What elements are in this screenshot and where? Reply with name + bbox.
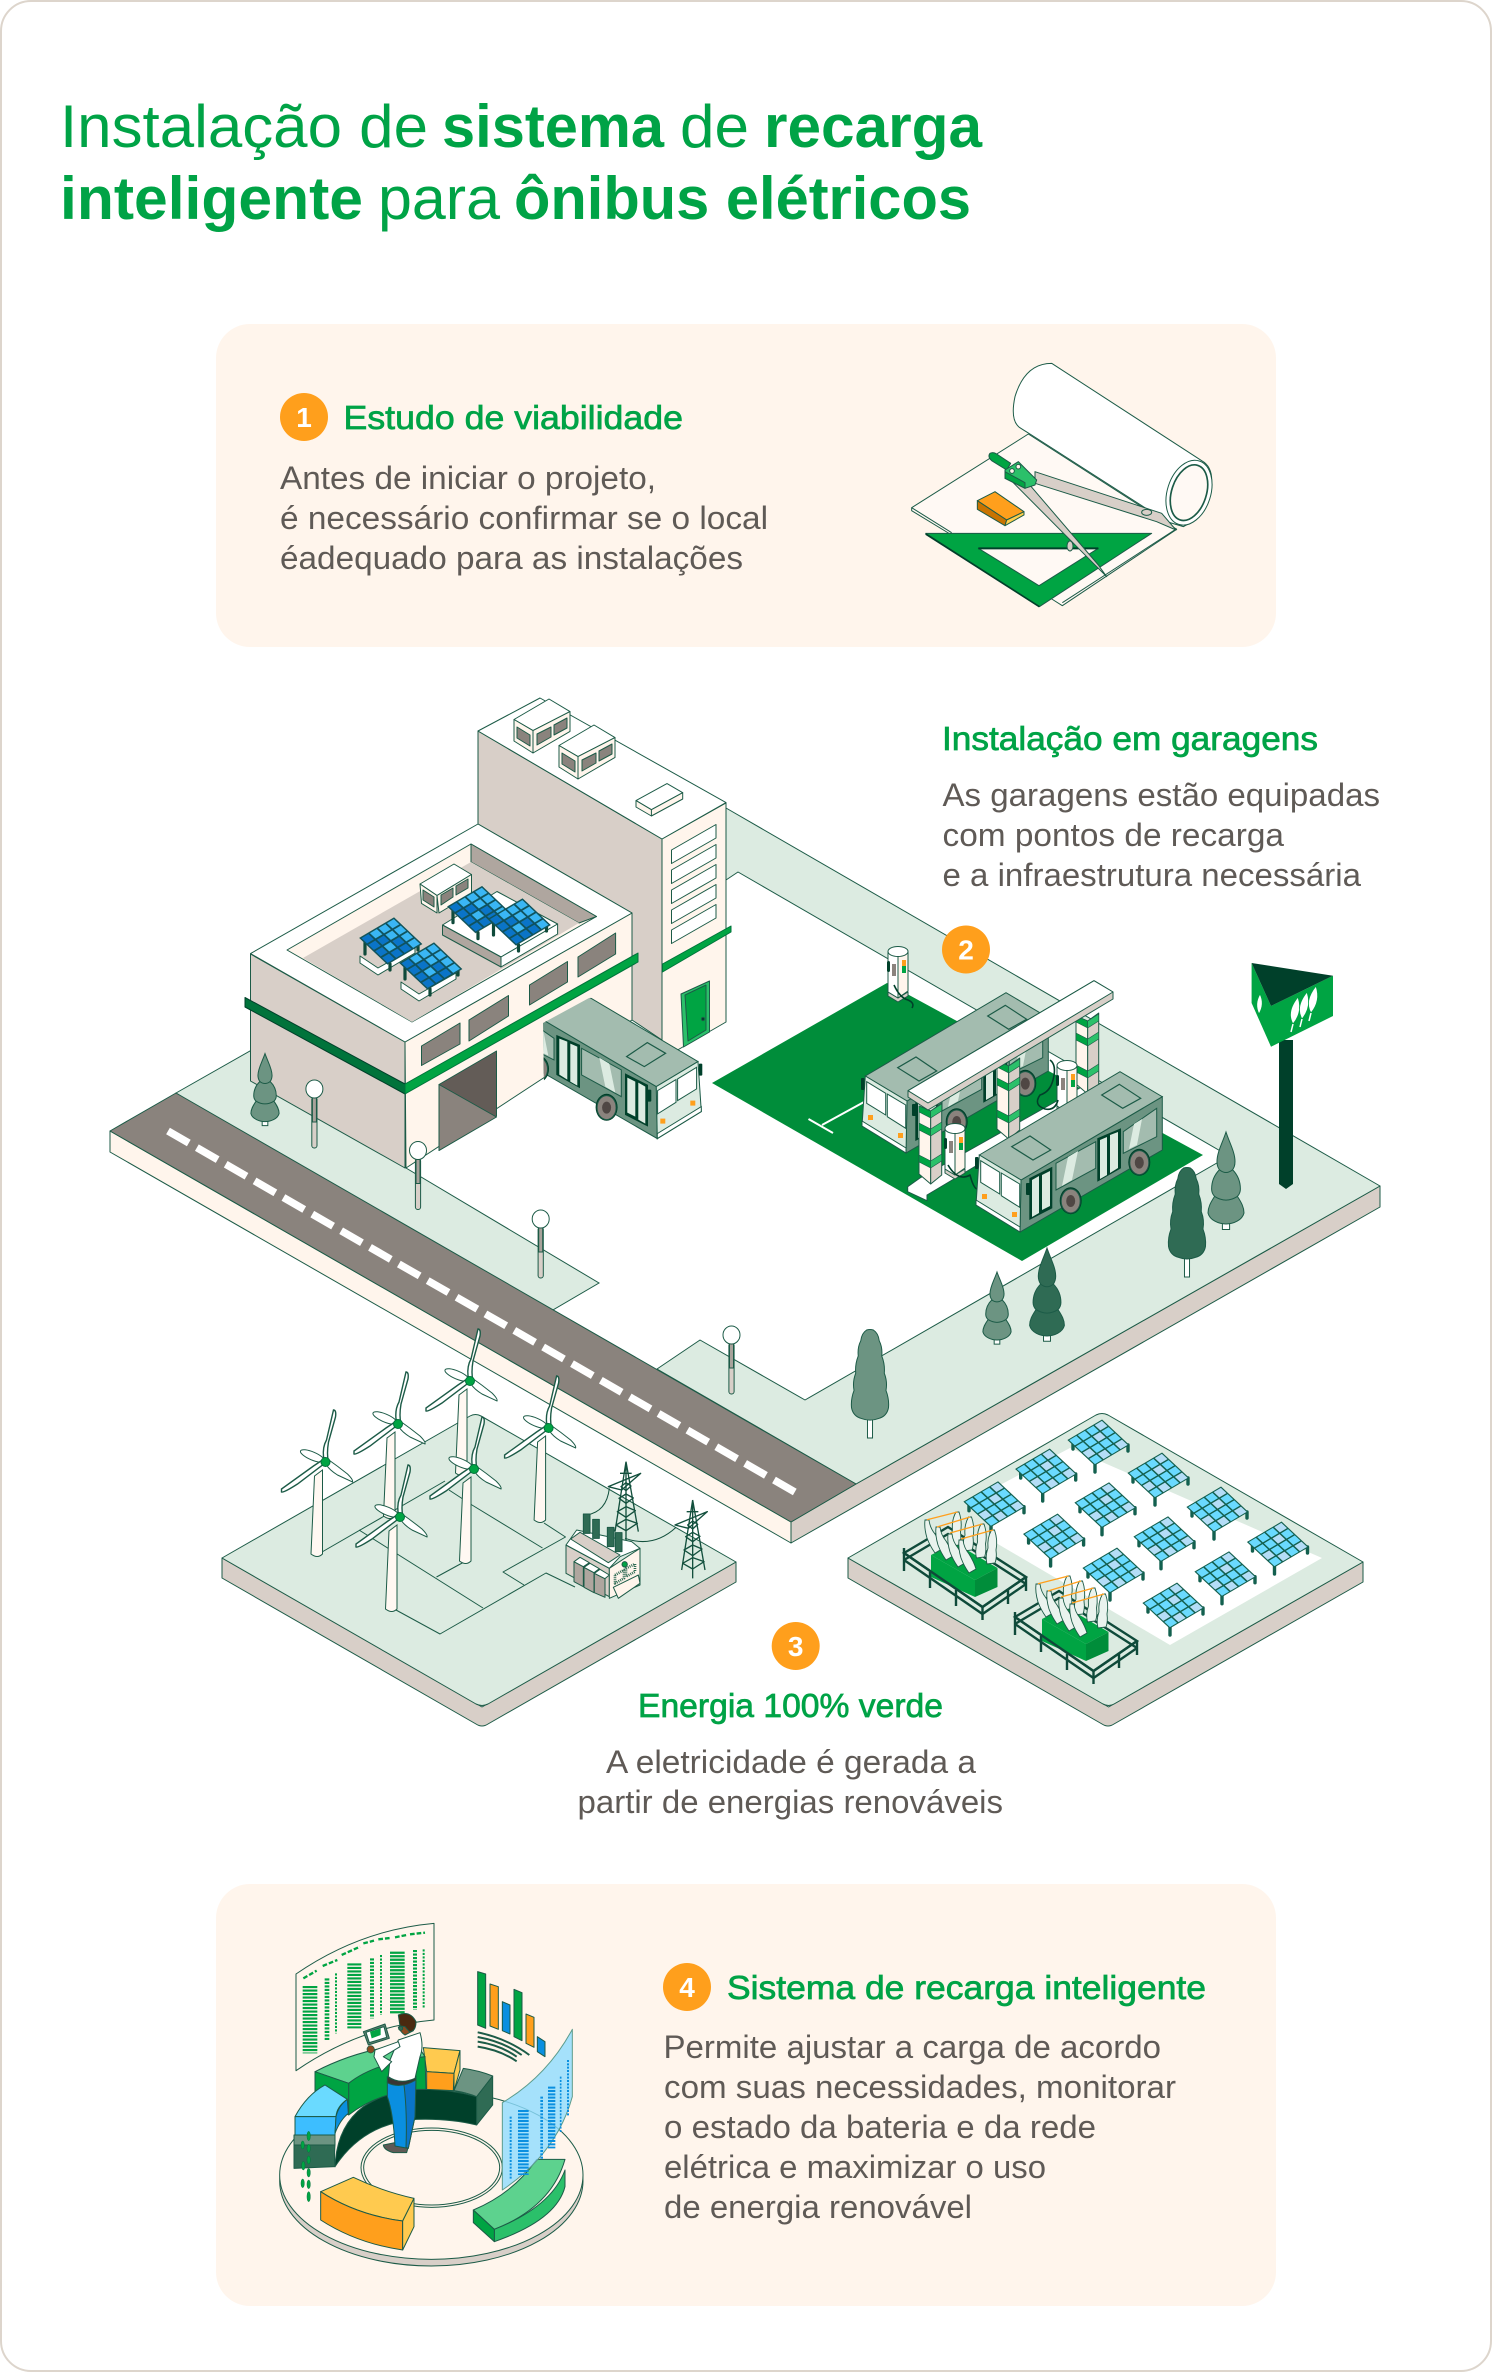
tower building — [478, 698, 731, 1059]
garage opening — [439, 1051, 496, 1150]
badge 2: 2 — [958, 934, 974, 966]
body text: energia verde — [578, 1744, 1003, 1820]
lamp posts — [306, 1080, 740, 1394]
wind farm plate — [222, 1414, 736, 1726]
title: Instalação de — [60, 93, 428, 160]
dark green segment — [294, 2135, 335, 2168]
title: de — [680, 93, 749, 160]
body text: estudo de viabilidade: é necessário confirmar se o local — [280, 500, 768, 536]
body text: sistema de recarga: de energia renovável — [664, 2189, 972, 2225]
heading: instalação em garagens: Instalação em garagens — [942, 720, 1318, 757]
icon: blueprint roll, compass, set square and eraser — [912, 363, 1220, 607]
bus leaving garage — [543, 998, 702, 1140]
body text: estudo de viabilidade: Antes de iniciar o projeto, — [280, 460, 656, 496]
substation and pylons — [566, 1462, 707, 1598]
body text: estudo de viabilidade: éadequado para as instalações — [280, 540, 743, 576]
body text: energia verde: partir de energias renováveis — [578, 1784, 1003, 1820]
grey-green segment — [454, 2068, 493, 2125]
badge 3: 3 — [788, 1631, 803, 1662]
body text: garagens: e a infraestrutura necessária — [942, 857, 1361, 893]
badge 1 — [280, 393, 328, 441]
body text: sistema de recarga: com suas necessidades, monitorar — [664, 2069, 1176, 2105]
scene: right L-shaped ground plate — [657, 808, 1380, 1543]
body text: sistema de recarga — [664, 2029, 1176, 2225]
dark back ring — [335, 2089, 477, 2167]
title: para — [378, 165, 501, 232]
green band — [245, 953, 638, 1094]
door — [681, 981, 710, 1047]
heading: energia 100% verde: Energia 100% verde — [638, 1687, 943, 1724]
tower green band — [662, 926, 731, 972]
badge 1: 1 — [296, 402, 312, 433]
panel: estudo de viabilidade — [216, 324, 1276, 647]
solar panel array — [963, 1420, 1309, 1635]
badge 2 — [942, 926, 990, 974]
body text: estudo de viabilidade — [280, 460, 768, 576]
rooftop platform and panels — [359, 864, 558, 1001]
wind turbines — [282, 1329, 576, 1612]
right data screen — [502, 2029, 572, 2190]
body text: garagens: com pontos de recarga — [942, 817, 1284, 853]
blue segment — [295, 2085, 348, 2135]
low garage building — [245, 824, 638, 1168]
badge 4 — [663, 1963, 711, 2011]
green dots column — [301, 2131, 310, 2202]
brand sign — [1252, 963, 1333, 1189]
icon: leaves on sign — [1257, 986, 1318, 1032]
badge 3 — [772, 1622, 820, 1670]
right wall windows — [422, 933, 616, 1066]
title: inteligente — [60, 165, 363, 232]
body text: sistema de recarga: Permite ajustar a carga de acordo — [664, 2029, 1161, 2065]
transformer yards — [904, 1512, 1137, 1684]
body text: energia verde: A eletricidade é gerada a — [606, 1744, 976, 1780]
title: recarga — [764, 93, 983, 160]
back bus at charging station — [861, 993, 1048, 1153]
bar chart — [478, 1972, 545, 2061]
internal paths — [322, 1481, 575, 1634]
orange front segment — [321, 2177, 414, 2250]
badge 4: 4 — [679, 1972, 695, 2003]
green front segment — [473, 2159, 565, 2242]
panel: sistema de recarga inteligente — [216, 1884, 1276, 2306]
illustration: operator with dashboards — [280, 1923, 583, 2266]
solar farm plate — [848, 1414, 1363, 1726]
title — [60, 93, 983, 232]
body text: garagens — [942, 777, 1380, 893]
charging pad — [712, 983, 1203, 1261]
heading: estudo de viabilidade: Estudo de viabilidade — [344, 399, 683, 436]
tower windows — [672, 824, 716, 944]
yellow segment — [423, 2048, 460, 2091]
heading: sistema de recarga inteligente: Sistema de recarga inteligente — [727, 1969, 1206, 2006]
body text: sistema de recarga: o estado da bateria e da rede — [664, 2109, 1096, 2145]
title: sistema — [442, 93, 665, 160]
body text: garagens: As garagens estão equipadas — [942, 777, 1380, 813]
front bus at charging station — [975, 1072, 1162, 1232]
roof units — [514, 699, 683, 816]
left data screen — [296, 1923, 434, 2071]
trees — [251, 1054, 1244, 1438]
person with tablet — [363, 2013, 422, 2153]
road — [110, 1093, 856, 1543]
charging station with canopy — [887, 946, 1113, 1201]
body text: sistema de recarga: elétrica e maximizar o uso — [664, 2149, 1046, 2185]
big green segment — [315, 2044, 426, 2115]
title: ônibus elétricos — [514, 165, 971, 232]
sidewalk in front of building — [176, 1051, 599, 1321]
